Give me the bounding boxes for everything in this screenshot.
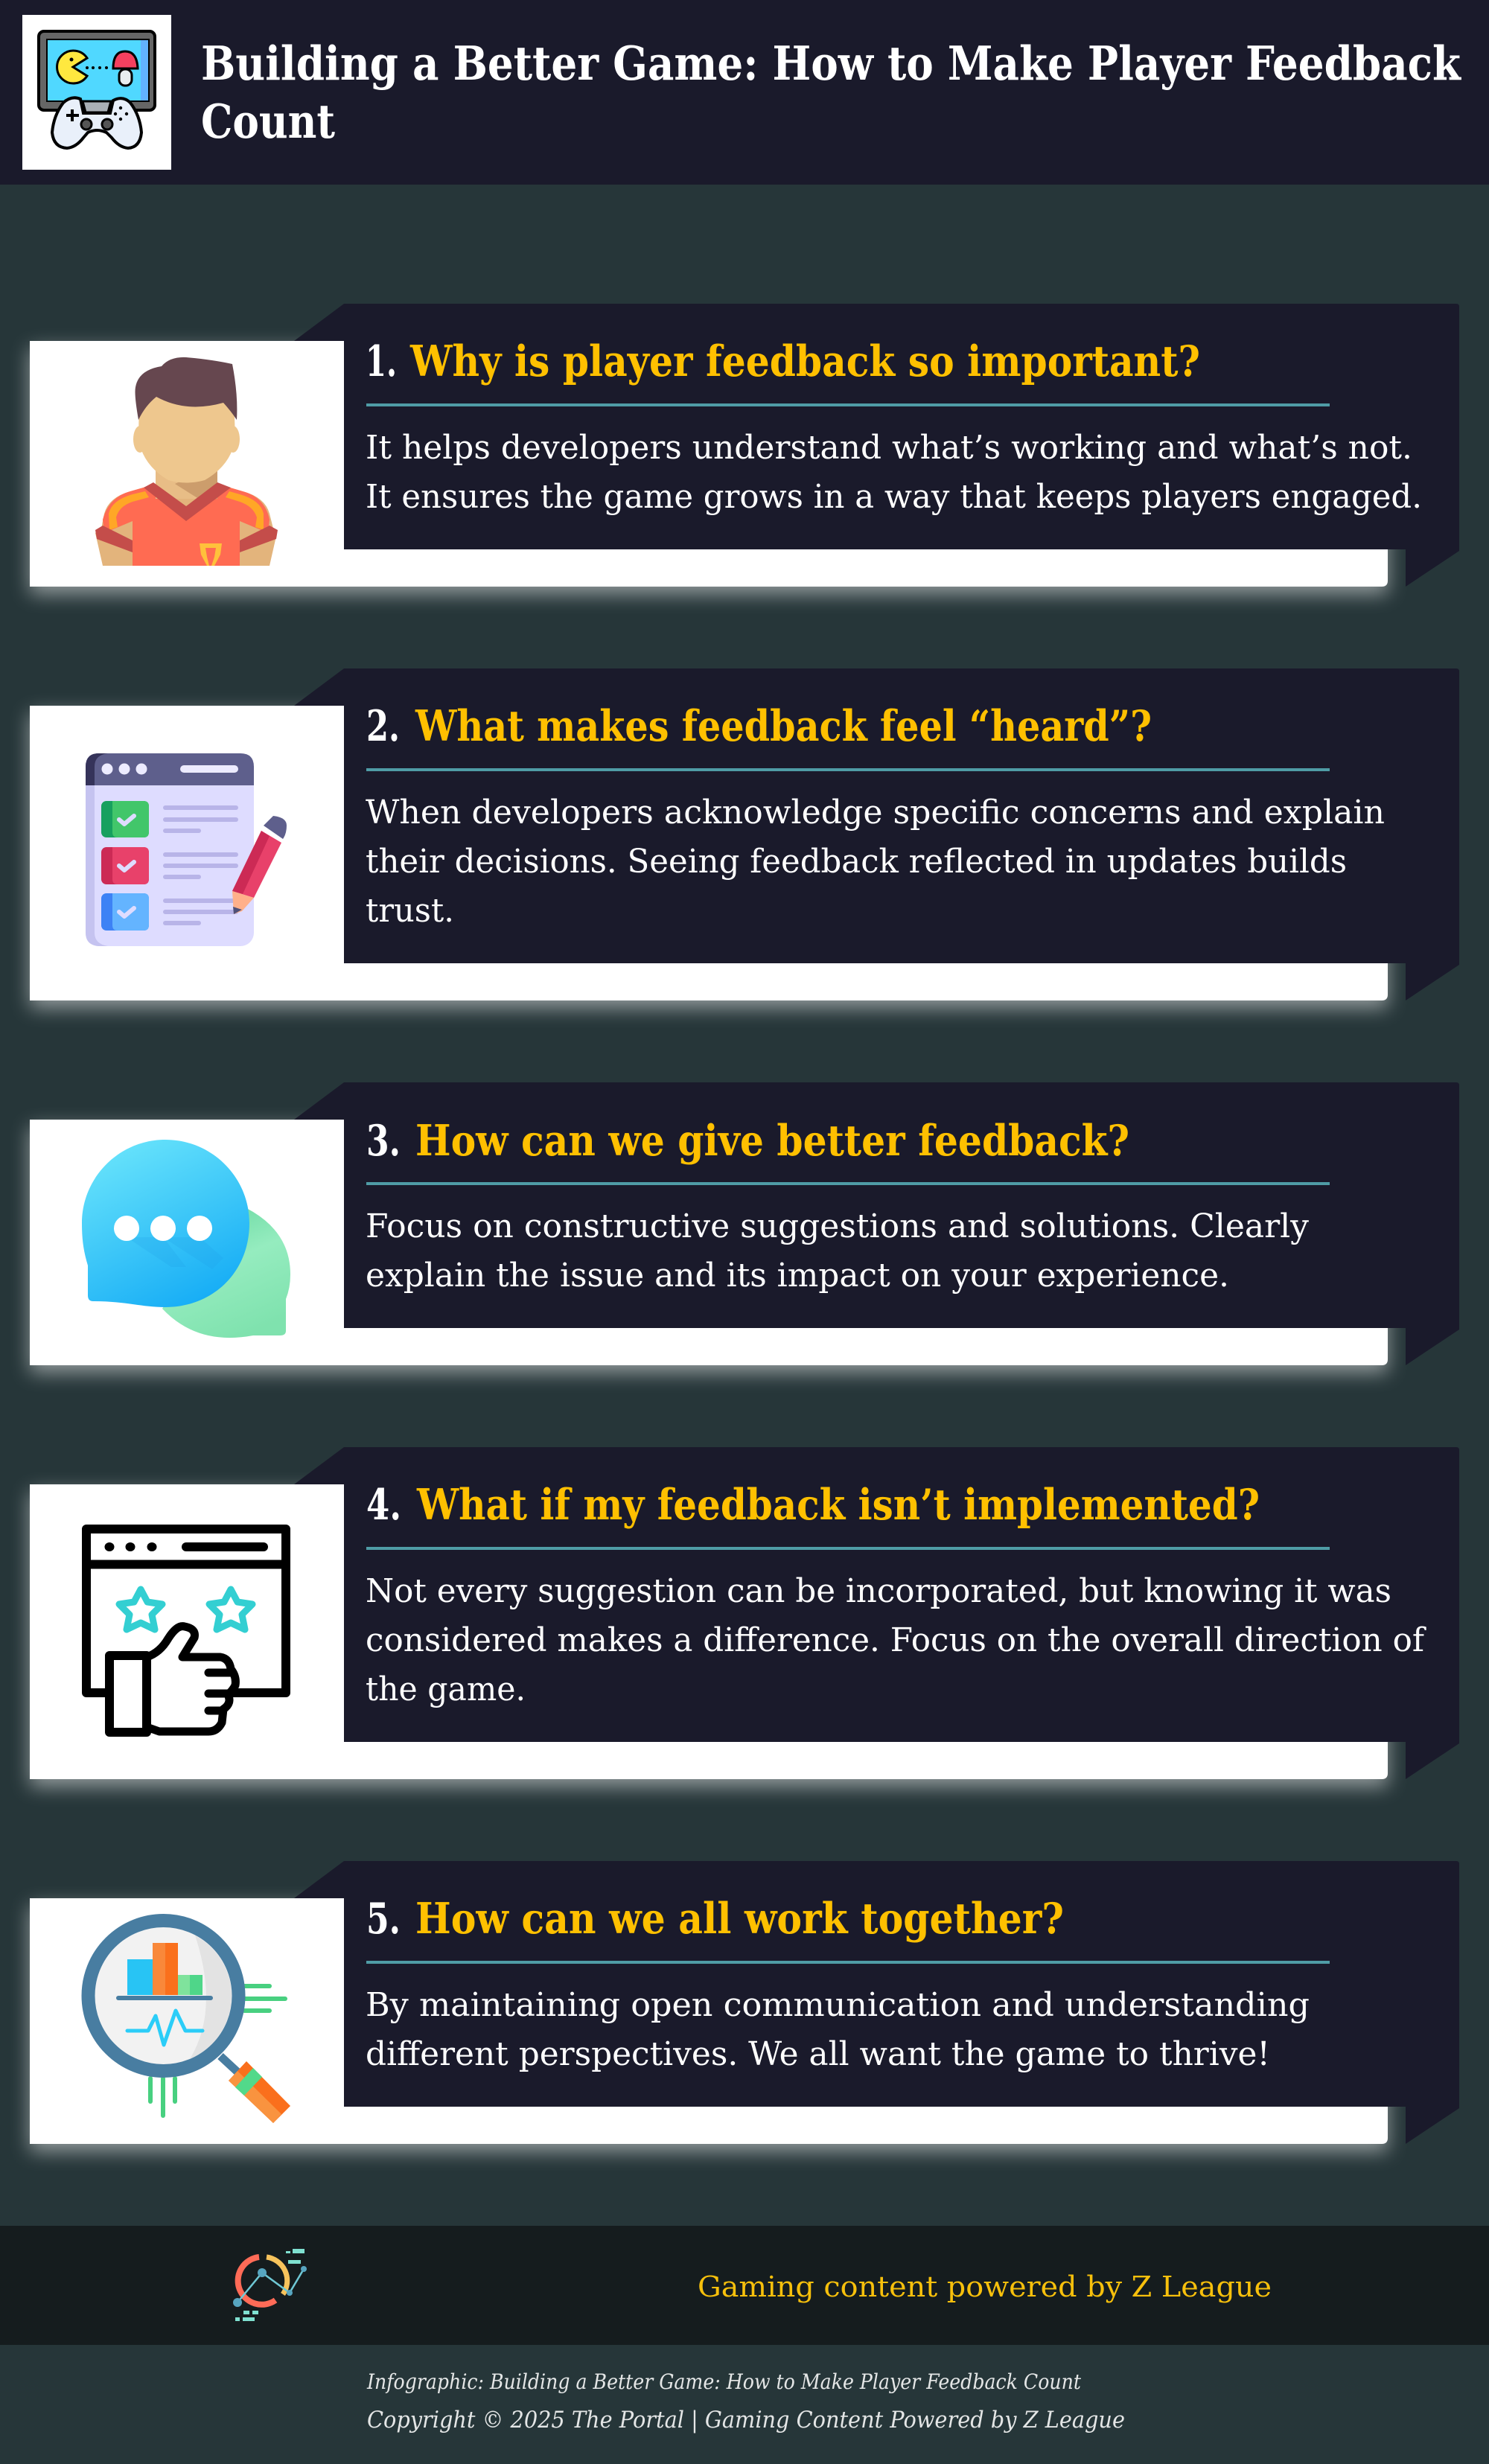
icon: Z League logo [233, 2249, 307, 2321]
dark panel 3 [294, 1082, 1459, 1365]
answer 2: When developers acknowledge specific concerns and explain [366, 794, 1385, 832]
panel: card 5 [30, 1861, 1459, 2151]
question 1: Why is player feedback so important? [409, 336, 1200, 386]
icon: game monitor and controller [22, 15, 171, 170]
answer 3: Focus on constructive suggestions and solutions. Clearly [366, 1207, 1309, 1245]
answer 5: different perspectives. We all want the game to thrive! [366, 2035, 1270, 2073]
question 3: 3. [366, 1116, 401, 1166]
answer 1: It ensures the game grows in a way that keeps players engaged. [366, 478, 1422, 516]
panel: card 2 [30, 668, 1459, 1008]
answer 3: explain the issue and its impact on your experience. [366, 1257, 1229, 1295]
footer credits: Infographic: Building a Better Game: How to Make Player Feedback Count [366, 2369, 1082, 2394]
question 5: 5. [366, 1894, 401, 1944]
header bar [0, 0, 1489, 185]
panel: card 3 [30, 1082, 1459, 1373]
panel: card 1 [30, 304, 1459, 594]
icon: player avatar [95, 357, 278, 566]
answer 4: the game. [366, 1670, 526, 1708]
question 4: 4. [366, 1480, 401, 1530]
white card 4 [30, 1484, 1388, 1779]
question 5: How can we all work together? [415, 1894, 1064, 1944]
answer 4: Not every suggestion can be incorporated, but knowing it was [366, 1572, 1391, 1610]
answer 4: considered makes a difference. Focus on the overall direction of [366, 1621, 1426, 1659]
answer 4 [366, 1572, 1426, 1708]
title: Count [201, 94, 335, 149]
dark panel 1 [294, 304, 1459, 587]
answer 2: their decisions. Seeing feedback reflected in updates builds [366, 843, 1347, 881]
icon: magnifier with charts [88, 1921, 290, 2123]
white card 2 [30, 706, 1388, 1000]
footer credits: Copyright © 2025 The Portal | Gaming Content Powered by Z League [367, 2407, 1125, 2433]
answer 1: It helps developers understand what’s working and what’s not. [366, 429, 1412, 467]
icon: browser window with thumbs up and stars [86, 1529, 286, 1732]
question 1: 1. [366, 336, 397, 386]
answer 2 [366, 794, 1385, 930]
title [201, 36, 1461, 149]
footer bar [0, 2226, 1489, 2345]
answer 3 [366, 1207, 1309, 1295]
dark panel 2 [294, 668, 1459, 1000]
answer 1 [366, 429, 1422, 516]
footer tagline: Gaming content powered by Z League [698, 2270, 1272, 2303]
white card 1 [30, 341, 1388, 587]
white card 3 [30, 1120, 1388, 1365]
answer 5: By maintaining open communication and understanding [366, 1986, 1310, 2024]
icon: chat bubbles [82, 1140, 290, 1338]
dark panel 4 [294, 1447, 1459, 1779]
white card 5 [30, 1898, 1388, 2144]
footer credits [366, 2369, 1125, 2433]
icon: checklist with pencil [86, 753, 287, 946]
answer 2: trust. [366, 892, 454, 930]
question 3: How can we give better feedback? [415, 1116, 1129, 1166]
question 4: What if my feedback isn’t implemented? [416, 1480, 1260, 1530]
dark panel 5 [294, 1861, 1459, 2144]
panel: card 4 [30, 1447, 1459, 1787]
answer 5 [366, 1986, 1310, 2073]
question 2: 2. [366, 701, 400, 751]
question 2: What makes feedback feel “heard”? [415, 701, 1152, 751]
